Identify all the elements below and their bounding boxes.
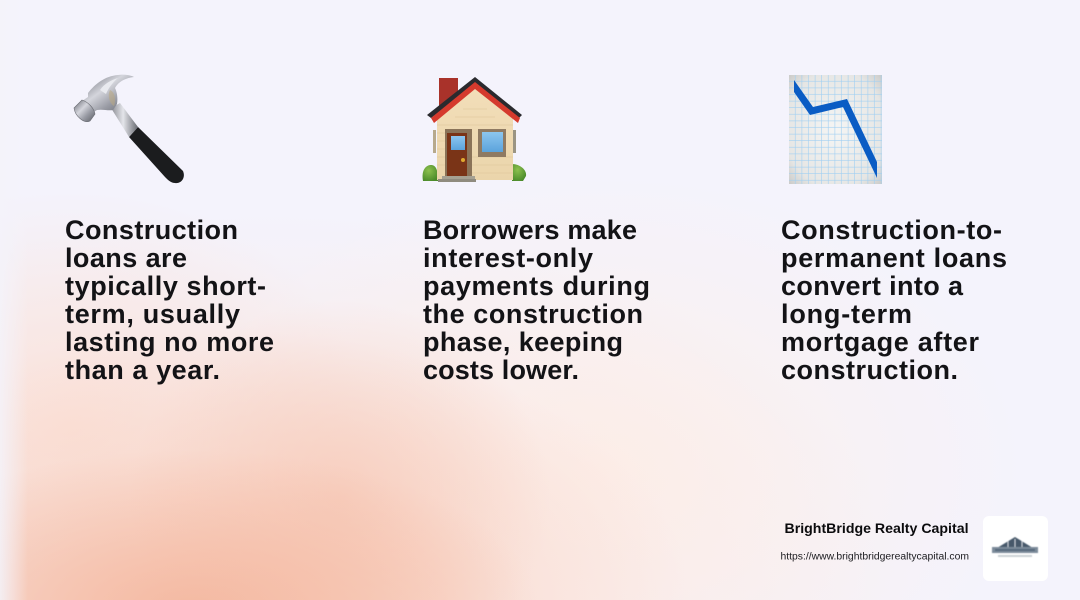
text: interest-only payments: Borrowers make [423, 215, 637, 245]
text: construction loans short-term: lasting no more [65, 327, 274, 357]
text: interest-only payments: interest-only [423, 243, 593, 273]
text: construction-to-permanent loans: long-term [781, 299, 912, 329]
text: construction loans short-term: than a year. [65, 355, 220, 385]
text: construction-to-permanent loans: construction. [781, 355, 958, 385]
text: construction loans short-term: loans are [65, 243, 187, 273]
text: construction-to-permanent loans: convert into a [781, 271, 964, 301]
icon: chart decreasing [789, 75, 882, 184]
website url: https://www.brightbridgerealtycapital.com [780, 552, 969, 562]
text: construction-to-permanent loans: permanent loans [781, 243, 1007, 273]
text: construction loans short-term [65, 215, 274, 385]
text: construction-to-permanent loans [781, 215, 1007, 385]
text: interest-only payments: payments during [423, 271, 650, 301]
brand name: BrightBridge Realty Capital [784, 521, 968, 536]
logo card [983, 516, 1048, 581]
text: construction loans short-term: typically short- [65, 271, 266, 301]
text: construction-to-permanent loans: Construction-to- [781, 215, 1002, 245]
text: construction loans short-term: term, usually [65, 299, 240, 329]
text: construction-to-permanent loans: mortgage after [781, 327, 979, 357]
text: construction loans short-term: Construction [65, 215, 238, 245]
text: interest-only payments [423, 215, 650, 385]
icon: hammer [74, 75, 184, 183]
text: interest-only payments: costs lower. [423, 355, 579, 385]
icon: house [423, 77, 526, 182]
text: interest-only payments: phase, keeping [423, 327, 623, 357]
text: interest-only payments: the construction [423, 299, 643, 329]
